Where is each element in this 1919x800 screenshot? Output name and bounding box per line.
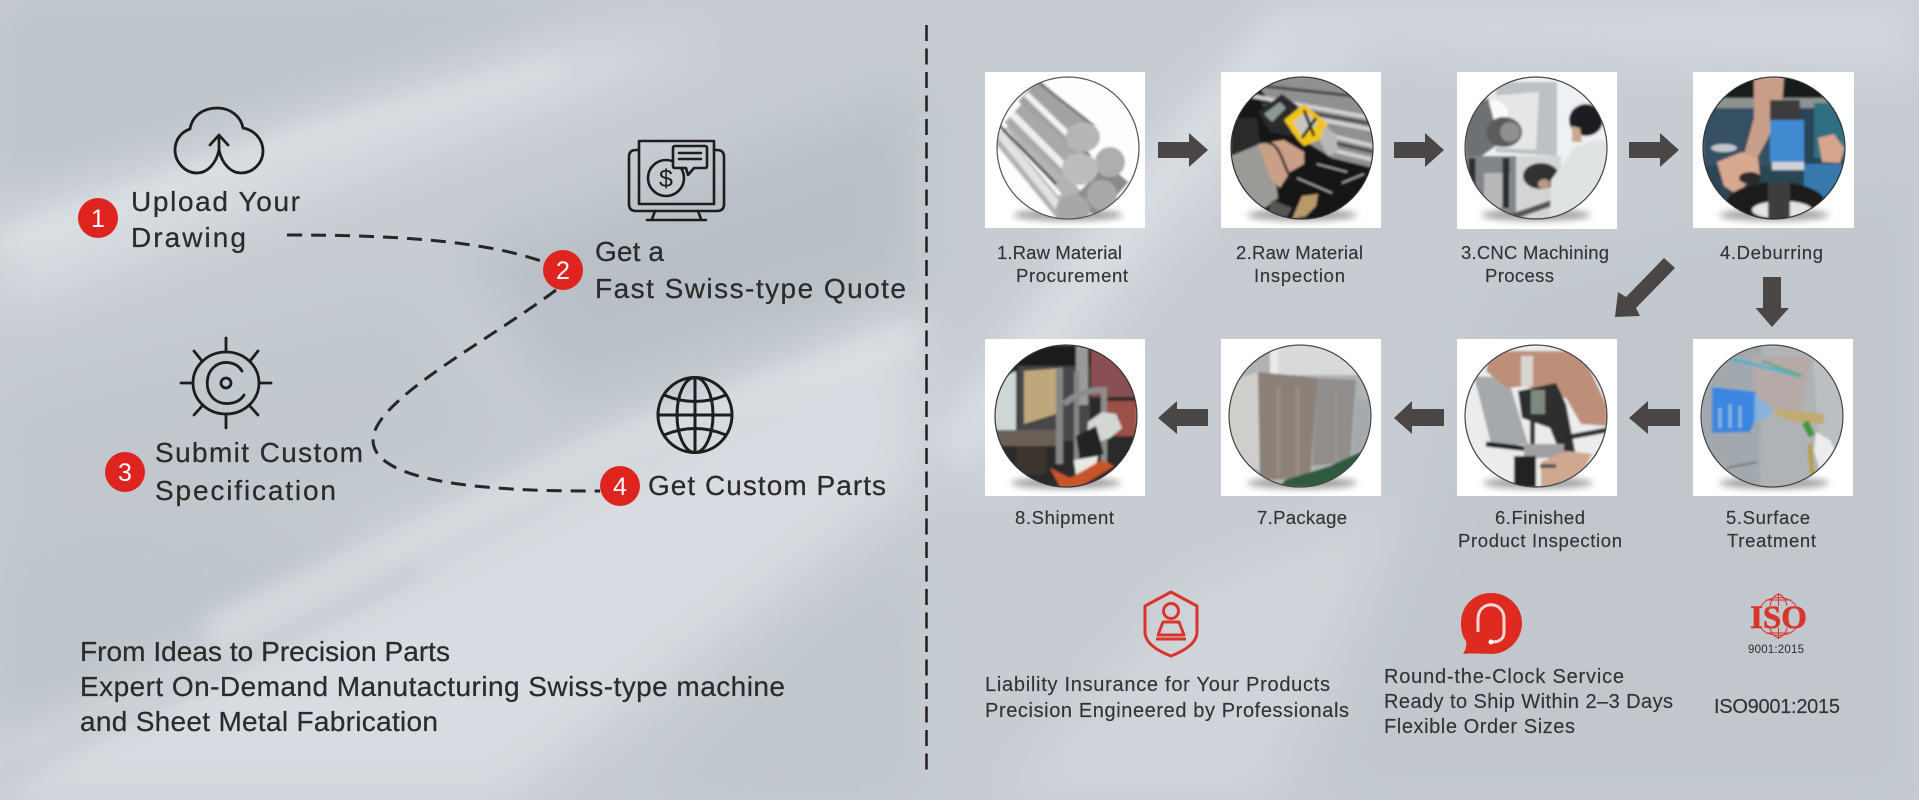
arrow 6 to 7	[1394, 401, 1444, 434]
badge 1	[78, 198, 118, 238]
photo captions: Procurement	[1016, 265, 1128, 286]
icon: ISO badge: ISO	[1750, 600, 1807, 636]
photo 6: finished product inspection	[1457, 339, 1617, 496]
photo captions	[997, 242, 1823, 551]
step 4 label: Get Custom Parts	[648, 470, 886, 501]
icon glyph: dollar: $	[659, 165, 673, 193]
arrow 5 to 6	[1629, 401, 1680, 434]
tagline: and Sheet Metal Fabrication	[80, 706, 438, 737]
icon: monitor quote	[629, 141, 724, 220]
arrow 3 to 4	[1629, 133, 1679, 167]
photo captions: 6.Finished	[1495, 507, 1585, 528]
photo 3: CNC machining	[1457, 72, 1617, 229]
badge 2	[543, 250, 583, 290]
arrow 1 to 2	[1158, 133, 1208, 167]
photo captions: Process	[1485, 265, 1554, 286]
diagonal arrow	[1615, 258, 1675, 317]
arrow 2 to 3	[1394, 133, 1444, 167]
step 3 label: Submit Custom	[155, 437, 363, 468]
photo captions: 2.Raw Material	[1236, 242, 1363, 263]
step 3 label	[155, 437, 363, 506]
photo captions: 4.Deburring	[1720, 242, 1823, 263]
step 2	[543, 141, 906, 304]
guarantees: service: Ready to Ship Within 2–3 Days	[1384, 691, 1673, 713]
badge 2: 2	[556, 257, 570, 285]
photo captions: 5.Surface	[1726, 507, 1810, 528]
step 4	[600, 377, 886, 506]
arrow 4 to 5	[1756, 277, 1789, 327]
icon: ISO badge: 9001:2015	[1748, 644, 1804, 656]
photo 5: surface treatment	[1693, 339, 1853, 496]
guarantees: insurance	[985, 674, 1349, 722]
badge 4: 4	[613, 473, 627, 501]
step 2 label: Fast Swiss-type Quote	[595, 273, 906, 304]
guarantees: service: Flexible Order Sizes	[1384, 716, 1575, 738]
photo captions: 7.Package	[1257, 507, 1347, 528]
icon: support chat	[1461, 593, 1522, 654]
guarantees: service: Round-the-Clock Service	[1384, 666, 1624, 688]
photo captions: Treatment	[1727, 530, 1816, 551]
guarantees: insurance: Precision Engineered by Professionals	[985, 700, 1349, 722]
tagline: From Ideas to Precision Parts	[80, 636, 450, 667]
badge 3	[105, 452, 145, 492]
step 2 label	[595, 236, 906, 304]
step 3	[105, 338, 363, 506]
guarantees: service	[1384, 666, 1673, 738]
badge 4	[600, 466, 640, 506]
divider	[925, 25, 928, 775]
photo 8: shipment	[985, 339, 1145, 496]
tagline	[80, 636, 785, 737]
photo captions: Inspection	[1254, 265, 1345, 286]
badge 1: 1	[91, 205, 105, 233]
step 1	[78, 108, 300, 253]
icon: shield	[1145, 592, 1197, 656]
step 1 label	[131, 186, 300, 253]
step 1 label: Upload Your	[131, 186, 300, 217]
guarantees: insurance: Liability Insurance for Your Products	[985, 674, 1330, 696]
arrow 7 to 8	[1158, 401, 1208, 434]
icon: gear spec	[181, 338, 271, 428]
photo captions: 8.Shipment	[1015, 507, 1114, 528]
photo captions: 1.Raw Material	[997, 242, 1122, 263]
photo 1: raw material	[985, 72, 1145, 228]
process path: dashed connectors	[287, 235, 600, 491]
step 2 label: Get a	[595, 236, 664, 267]
guarantees: certification: ISO9001:2015	[1714, 696, 1840, 718]
step 1 label: Drawing	[131, 222, 246, 253]
photo captions: 3.CNC Machining	[1461, 242, 1609, 263]
photo 4: deburring	[1693, 72, 1854, 228]
icon: globe	[658, 377, 732, 453]
photo captions: Product Inspection	[1458, 530, 1622, 551]
icon: cloud upload	[175, 108, 263, 173]
photo 2: raw material inspection	[1221, 72, 1381, 228]
icon: ISO badge	[1748, 593, 1807, 656]
photo 7: package	[1221, 339, 1381, 496]
step 3 label: Specification	[155, 475, 336, 506]
tagline: Expert On-Demand Manutacturing Swiss-type machine	[80, 671, 785, 702]
badge 3: 3	[118, 459, 132, 487]
